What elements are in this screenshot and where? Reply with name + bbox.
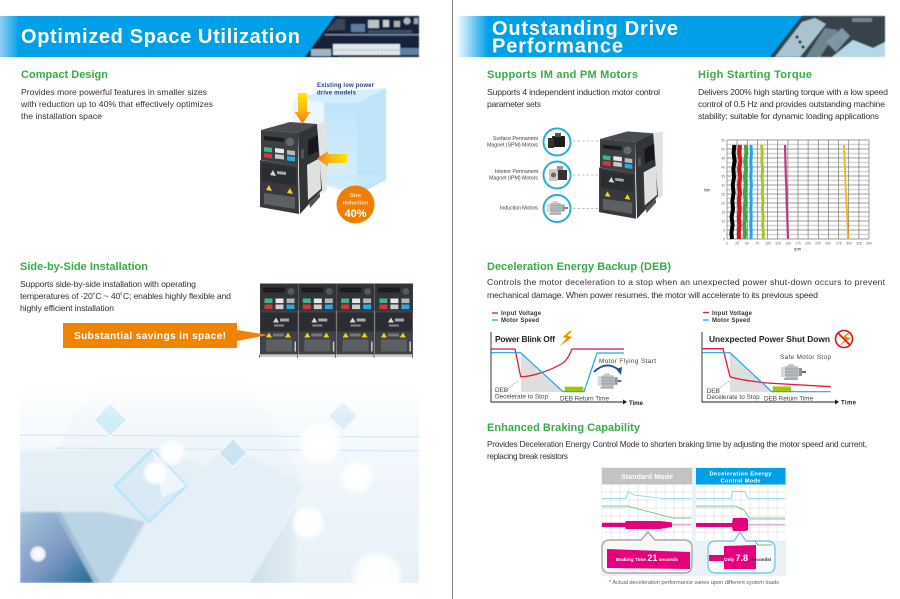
title: Unexpected Power Shut Down [709, 334, 830, 344]
x axis labels: 325 [856, 242, 862, 246]
decorative background image [20, 402, 419, 583]
y axis labels: 5 [723, 228, 725, 232]
body text [487, 277, 886, 300]
DEB labels: Motor Flying Start [599, 358, 656, 365]
body text: with reduction up to 40% that effectively optimizes [20, 99, 214, 109]
body text: temperatures of -20˚C ~ 40˚C; enables highly flexible and [20, 291, 231, 301]
voltage line [703, 349, 831, 387]
drives side by side [259, 284, 413, 358]
body text: control of 0.5 Hz and provides outstanding machine [698, 99, 885, 109]
banner title: Outstanding Drive [492, 18, 678, 40]
body text: Supports 4 independent induction motor control [487, 87, 660, 97]
body text: Controls the motor deceleration to a stop when an unexpected power shut-down occurs to prevent [487, 277, 886, 287]
header: Deceleration Energy [710, 472, 772, 478]
body text [698, 87, 888, 121]
axis titles: rpm [794, 246, 802, 252]
callout: substantial savings: Substantial savings in space! [74, 331, 226, 342]
axis titles [704, 188, 802, 252]
waveform grid [696, 484, 786, 540]
y axis labels: 50 [721, 148, 725, 152]
arrow: side [317, 151, 347, 166]
time label: Time [841, 400, 857, 406]
y axis labels [721, 138, 725, 242]
icon: no power [836, 330, 852, 348]
return time bar [565, 387, 583, 392]
section: Side-by-Side Installation [20, 261, 231, 313]
DEB labels: Decelerate to Stop [495, 394, 548, 400]
label: existing models: drive models [317, 90, 357, 96]
y axis labels: 0 [723, 238, 725, 242]
y axis labels: 10 [721, 220, 725, 224]
section: High Starting Torque [698, 69, 888, 121]
x axis labels: 150 [785, 242, 791, 246]
y axis labels: 30 [721, 184, 725, 188]
chart: unexpected power shut down [702, 311, 857, 406]
motor labels: Surface Permanent [493, 136, 538, 142]
y axis labels: 40 [721, 166, 725, 170]
legend [492, 311, 542, 324]
section: Enhanced Braking Capability [487, 422, 867, 461]
speed trace [696, 492, 785, 498]
x axis labels: 0 [726, 242, 728, 246]
label: existing models: Existing low power [317, 83, 375, 89]
motor labels: Magnet (SPM) Motors [487, 142, 538, 148]
x axis labels [726, 242, 872, 246]
legend: Motor Speed [712, 318, 750, 324]
body text [487, 440, 867, 461]
DEB labels: DEB Return Time [560, 396, 609, 402]
deceleration area [521, 353, 563, 392]
body text: Provides more powerful features in smaller sizes [21, 87, 208, 97]
current trace [696, 506, 749, 518]
body text: highly efficient installation [20, 303, 114, 313]
DEB labels: Safe Motor Stop [780, 354, 831, 361]
banner image: circuit board [305, 16, 419, 57]
deceleration area [730, 353, 771, 392]
title: Power Blink Off [495, 334, 555, 344]
panel: left page header banner [0, 16, 419, 57]
DEB labels [495, 358, 656, 402]
body text: Delivers 200% high starting torque with a low speed [698, 87, 888, 97]
header: Standard Mode [621, 474, 673, 481]
DEB labels: DEB Return Time [764, 396, 813, 402]
body text: parameter sets [487, 99, 542, 109]
heading: Deceleration Energy Backup (DEB) [487, 261, 671, 273]
body text [20, 279, 231, 313]
diagram: motor types [487, 128, 663, 222]
body text [20, 87, 214, 121]
callout: substantial savings [63, 323, 268, 348]
motor labels: Induction Motors [500, 206, 538, 212]
icon: SPM motor [544, 128, 570, 156]
icon: motor [781, 364, 806, 380]
section: Compact Design [20, 69, 214, 121]
axis titles: Nm [704, 188, 711, 192]
x axis labels: 300 [846, 242, 852, 246]
heading: Enhanced Braking Capability [487, 422, 641, 434]
y axis labels: 25 [721, 192, 725, 196]
braking trace [602, 521, 672, 529]
x axis labels: 275 [836, 242, 842, 246]
comparison background [601, 467, 786, 576]
dashed connectors [573, 141, 600, 208]
legend [703, 311, 753, 324]
arrow: top [294, 93, 310, 124]
header: Control Mode [720, 478, 761, 484]
motor labels: Magnet (IPM) Motors [489, 176, 538, 182]
y axis labels: 15 [721, 210, 725, 214]
x axis labels: 75 [755, 242, 759, 246]
motor labels: Interior Permanent [495, 169, 538, 175]
chart: power blink off [491, 311, 656, 407]
x axis labels: 100 [765, 242, 771, 246]
current trace [602, 506, 691, 518]
callout bubble: Braking Time 21 seconds [616, 553, 679, 563]
axes [702, 332, 836, 402]
body text: the installation space [21, 111, 102, 121]
badge: size reduction: Size [350, 193, 361, 199]
y axis labels: 45 [721, 156, 725, 160]
DEB labels: Decelerate to Stop [707, 394, 760, 401]
heading: High Starting Torque [698, 69, 812, 81]
drive unit [599, 131, 663, 219]
footnote: * Actual deceleration performance varies upon different system loads [609, 580, 779, 586]
badge: size reduction: reduction [343, 200, 369, 206]
banner title [492, 18, 678, 58]
body text [487, 87, 660, 109]
body text: Provides Deceleration Energy Control Mode to shorten braking time by adjusting the motor speed and current, [487, 440, 867, 449]
chart: torque vs speed [704, 138, 872, 252]
x axis labels: 225 [815, 242, 821, 246]
section: Deceleration Energy Backup [487, 261, 886, 300]
motor labels [487, 136, 538, 212]
time label: Time [629, 401, 644, 407]
drive unit [260, 122, 327, 214]
y axis labels: 35 [721, 174, 725, 178]
banner title: Optimized Space Utilization [21, 26, 300, 48]
body text: stability; suitable for dynamic loading applications [698, 111, 880, 121]
heading: Compact Design [21, 69, 108, 81]
icon: lightning [560, 331, 572, 346]
legend: Input Voltage [501, 311, 542, 317]
panel: deceleration energy control mode [696, 468, 786, 573]
heading: Side-by-Side Installation [20, 261, 148, 273]
diagram: size reduction comparison [260, 83, 386, 224]
label: existing models [317, 83, 375, 96]
icon: motor with rotation arrow [594, 365, 622, 389]
voltage line [491, 349, 624, 377]
legend: Motor Speed [501, 318, 539, 324]
panel: standard mode [602, 468, 692, 573]
existing drive size box [293, 88, 386, 195]
heading: Supports IM and PM Motors [487, 69, 638, 81]
y axis labels: 20 [721, 202, 725, 206]
banner image: machinery [770, 16, 885, 57]
x axis labels: 125 [775, 242, 781, 246]
axes [491, 332, 625, 402]
chart grid [727, 140, 869, 239]
DEB labels: DEB [707, 388, 720, 395]
icon: induction motor [544, 195, 570, 222]
badge: size reduction [336, 186, 374, 224]
braking trace [696, 518, 748, 531]
panel: right page header banner [456, 16, 885, 58]
x axis labels: 200 [805, 242, 811, 246]
speed line [703, 353, 831, 392]
body text: Supports side-by-side installation with operating [20, 279, 196, 289]
banner title: Performance [492, 36, 623, 58]
curves [731, 145, 848, 239]
speed line [491, 353, 624, 392]
callout bubble: Only 7.8 seconds! [724, 553, 772, 563]
body text: mechanical damage. When power resumes, the motor will accelerate to its previous speed [487, 290, 818, 300]
icon: IPM motor [544, 162, 570, 188]
x axis labels: 350 [866, 242, 872, 246]
badge: size reduction: 40% [344, 208, 367, 220]
DEB labels [707, 354, 831, 402]
legend: Input Voltage [712, 311, 753, 317]
DEB labels: DEB [495, 387, 508, 394]
header [696, 468, 786, 484]
chart: braking comparison [601, 467, 786, 586]
return time bar [773, 386, 791, 392]
waveform grid [602, 484, 692, 540]
x axis labels: 250 [825, 242, 831, 246]
y axis labels: 55 [721, 138, 725, 142]
speed trace [602, 492, 691, 498]
x axis labels: 175 [795, 242, 801, 246]
section: Supports IM and PM Motors [487, 69, 660, 109]
x axis labels: 50 [745, 242, 749, 246]
body text: replacing break resistors [487, 452, 568, 461]
x axis labels: 25 [735, 242, 739, 246]
